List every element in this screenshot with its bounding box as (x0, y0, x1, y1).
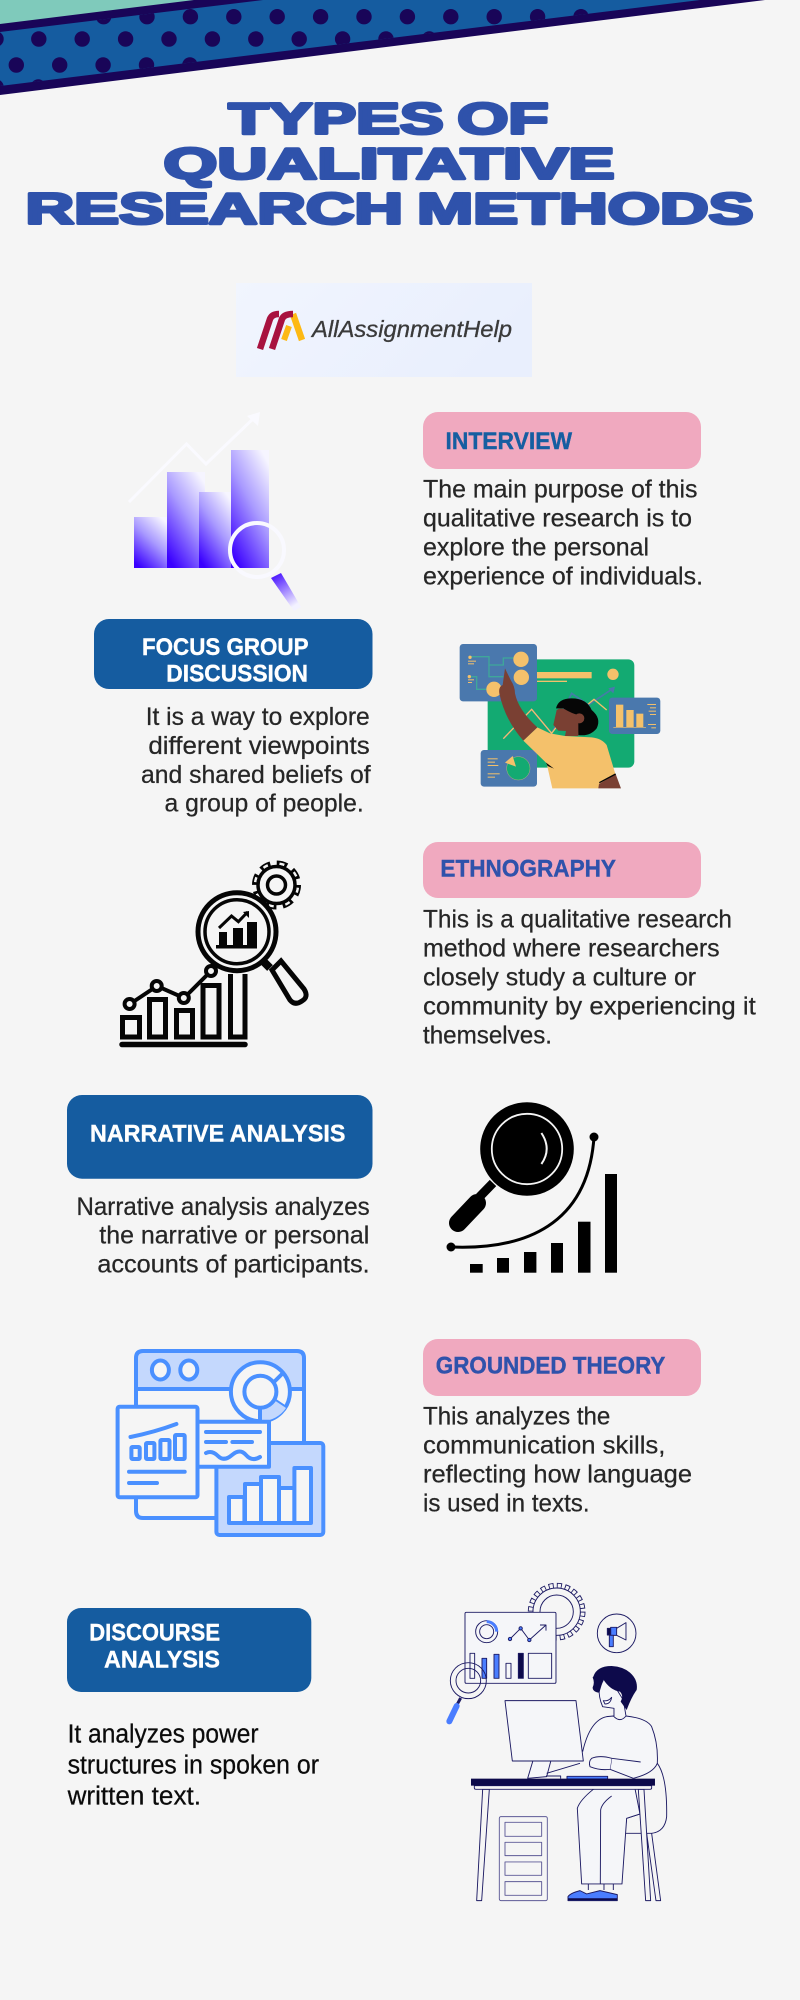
panel: narrative analysis (67, 1095, 372, 1279)
grounded theory text: communication skills, (423, 1432, 665, 1460)
desk (471, 1776, 655, 1901)
ethnography text: method where researchers (423, 935, 720, 963)
ethnography text: community by experiencing it (423, 993, 756, 1021)
discourse heading badge (67, 1608, 311, 1692)
grounded theory heading badge (423, 1339, 701, 1396)
ethnography text: themselves. (423, 1021, 552, 1049)
grounded theory heading badge: GROUNDED THEORY (436, 1352, 665, 1379)
megaphone (597, 1614, 636, 1653)
interview text: experience of individuals. (423, 563, 703, 591)
focus group text (141, 703, 371, 818)
panel: grounded theory (423, 1339, 701, 1518)
interview heading badge (423, 412, 701, 469)
discourse text (67, 1721, 319, 1811)
discourse text: written text. (67, 1783, 201, 1811)
narrative text: accounts of participants. (97, 1251, 370, 1279)
narrative text: the narrative or personal (99, 1222, 369, 1250)
focus group text: and shared beliefs of (141, 761, 371, 789)
interview text (423, 476, 703, 591)
drawer cabinet (499, 1817, 547, 1901)
discourse text: structures in spoken or (68, 1752, 319, 1780)
focus group text: different viewpoints (148, 732, 370, 760)
ethnography text (423, 906, 756, 1049)
data board (465, 1612, 556, 1683)
interview text: explore the personal (423, 534, 649, 562)
chair (625, 1763, 667, 1833)
focus group heading badge: DISCUSSION (166, 661, 308, 688)
icon: person working at desk with charts (449, 1586, 667, 1901)
grounded theory text: This analyzes the (423, 1403, 610, 1431)
grounded theory text (423, 1403, 692, 1518)
ethnography text: This is a qualitative research (423, 906, 732, 934)
icon: woman pointing at data boards (460, 644, 660, 788)
narrative heading badge (67, 1095, 372, 1179)
ethnography text: closely study a culture or (423, 964, 696, 992)
interview heading badge: INTERVIEW (446, 428, 573, 455)
discourse heading badge: DISCOURSE (89, 1620, 220, 1647)
title (26, 94, 754, 234)
icon: solid magnifier with curve and rising bars (446, 1102, 617, 1273)
title: TYPES OF (228, 94, 548, 144)
icon: black magnifier, gear and bars (122, 864, 306, 1044)
ethnography heading badge: ETHNOGRAPHY (440, 856, 616, 883)
focus group heading badge (94, 619, 372, 689)
focus group heading badge: FOCUS GROUP (142, 634, 308, 661)
logo wordmark: AllAssignmentHelp (310, 316, 512, 342)
panel: focus group discussion (94, 619, 372, 818)
narrative text: Narrative analysis analyzes (76, 1193, 370, 1221)
panel: interview (423, 412, 703, 591)
person (568, 1666, 657, 1901)
grounded theory text: reflecting how language (423, 1461, 692, 1489)
icon: logo mark (260, 314, 302, 349)
icon: blue dashboard windows (118, 1351, 323, 1535)
focus group text: It is a way to explore (146, 703, 370, 731)
gear (255, 864, 298, 906)
icon: gradient bar chart with magnifier (129, 412, 301, 611)
ethnography heading badge (423, 842, 701, 898)
grounded theory text: is used in texts. (423, 1490, 590, 1518)
narrative heading badge: NARRATIVE ANALYSIS (90, 1121, 345, 1148)
focus group text: a group of people. (164, 790, 364, 818)
title: QUALITATIVE (164, 140, 614, 188)
interview text: qualitative research is to (423, 505, 692, 533)
magnifier (449, 1663, 486, 1721)
title: RESEARCH METHODS (26, 184, 754, 234)
panel: discourse analysis (67, 1608, 319, 1811)
panel: ethnography (423, 842, 756, 1049)
discourse heading badge: ANALYSIS (104, 1647, 220, 1674)
logo panel: AllAssignmentHelp (236, 283, 532, 377)
gear (531, 1586, 583, 1638)
banner: diagonal stripes with dots (0, 0, 765, 95)
narrative text (76, 1193, 370, 1279)
interview text: The main purpose of this (423, 476, 698, 504)
discourse text: It analyzes power (68, 1721, 259, 1749)
monitor (505, 1701, 583, 1779)
